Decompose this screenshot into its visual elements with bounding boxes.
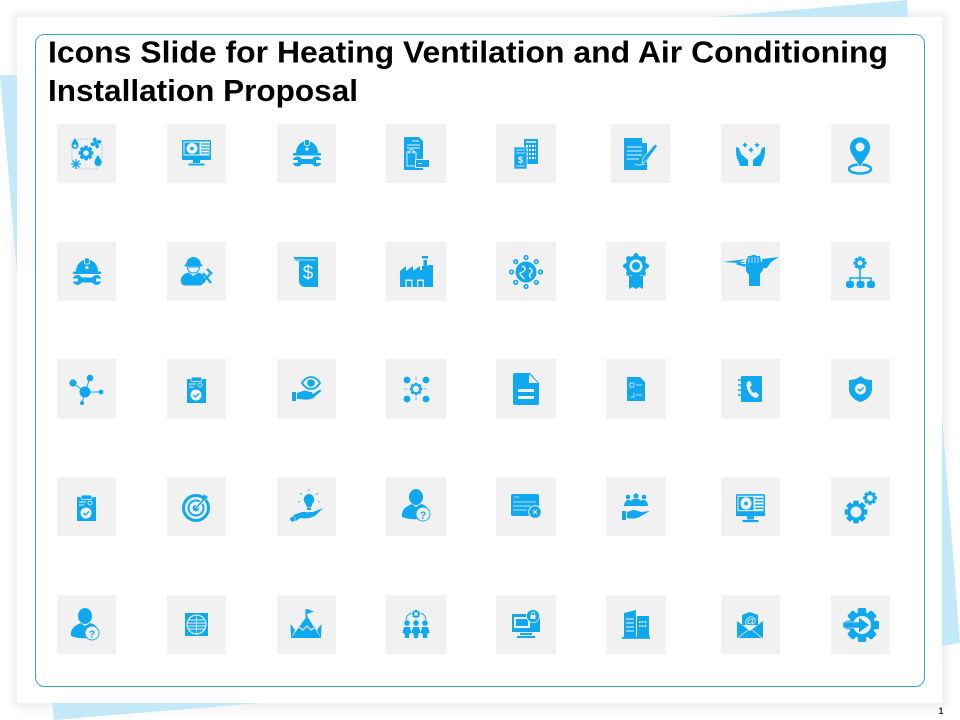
- icon: person with question, second: ?: [89, 630, 95, 640]
- icon: location pin: [831, 124, 890, 183]
- icon: document with bag and card: [386, 124, 446, 183]
- icon: globe network: [496, 242, 556, 301]
- title: Installation Proposal: [48, 73, 358, 108]
- icon: gear with arrow: [831, 595, 890, 654]
- icon: person with question: ?: [420, 510, 426, 522]
- accent: bottom blue sheet: [52, 703, 260, 720]
- icon: mountain with flag: [277, 595, 336, 654]
- icon: clipboard check: [167, 359, 226, 419]
- icon: hands with sparkles: [721, 124, 780, 183]
- icon: team in hand: [606, 477, 666, 536]
- icon: monitor with fan: [167, 124, 226, 183]
- icon: monitor with lock: [496, 595, 556, 654]
- icon: HVAC gear with water, fan and snow: [57, 124, 116, 183]
- icon: invoice and calculator: $: [518, 155, 523, 165]
- icon: shield check: [831, 359, 890, 419]
- title: [48, 34, 888, 108]
- icon: checklist document: [606, 359, 666, 419]
- icon: email envelope: [721, 595, 780, 654]
- icon: target with arrow: [167, 477, 226, 536]
- icon: person with question: [386, 477, 446, 536]
- icon: worker with tools: [167, 242, 226, 301]
- icon: gear hierarchy: [831, 242, 890, 301]
- icon: air vent: [167, 595, 226, 654]
- icon: hand with light bulb: [277, 477, 336, 536]
- icon: hand and eye: [277, 359, 336, 419]
- icon: network nodes: [57, 359, 116, 419]
- icon: fist with lightning: [721, 242, 780, 301]
- icon: office buildings: [606, 595, 666, 654]
- title: Icons Slide for Heating Ventilation and Air Conditioning: [48, 34, 888, 70]
- icon: dollar scroll: $: [303, 263, 314, 284]
- icon: helmet and wrench, second: [57, 242, 116, 301]
- icon: phone book: [721, 359, 780, 419]
- icon: invoice and calculator: [496, 124, 556, 183]
- page number: 1: [938, 706, 944, 716]
- icon: team with gear: [386, 595, 446, 654]
- accent: right blue sheet: [942, 417, 960, 646]
- icon: card with cross: [496, 477, 556, 536]
- icon: clipboard check, second: [57, 477, 116, 536]
- icon: person with question, second: [57, 595, 116, 654]
- icon: email envelope: @: [744, 614, 757, 628]
- icon: factory: [386, 242, 446, 301]
- icon: central gear with four badges: [386, 359, 446, 419]
- icon: document and pen: [611, 124, 670, 183]
- icon: document with bars: [496, 359, 556, 419]
- icon: award ribbon: [606, 242, 666, 301]
- icon: dollar scroll: [277, 242, 336, 301]
- icon: two gears: [831, 477, 890, 536]
- accent: left blue sheet: [0, 75, 17, 273]
- accent: top right blue sheet: [713, 0, 908, 17]
- icon: helmet and wrench: [277, 124, 336, 183]
- icon: monitor with fan, second: [721, 477, 780, 536]
